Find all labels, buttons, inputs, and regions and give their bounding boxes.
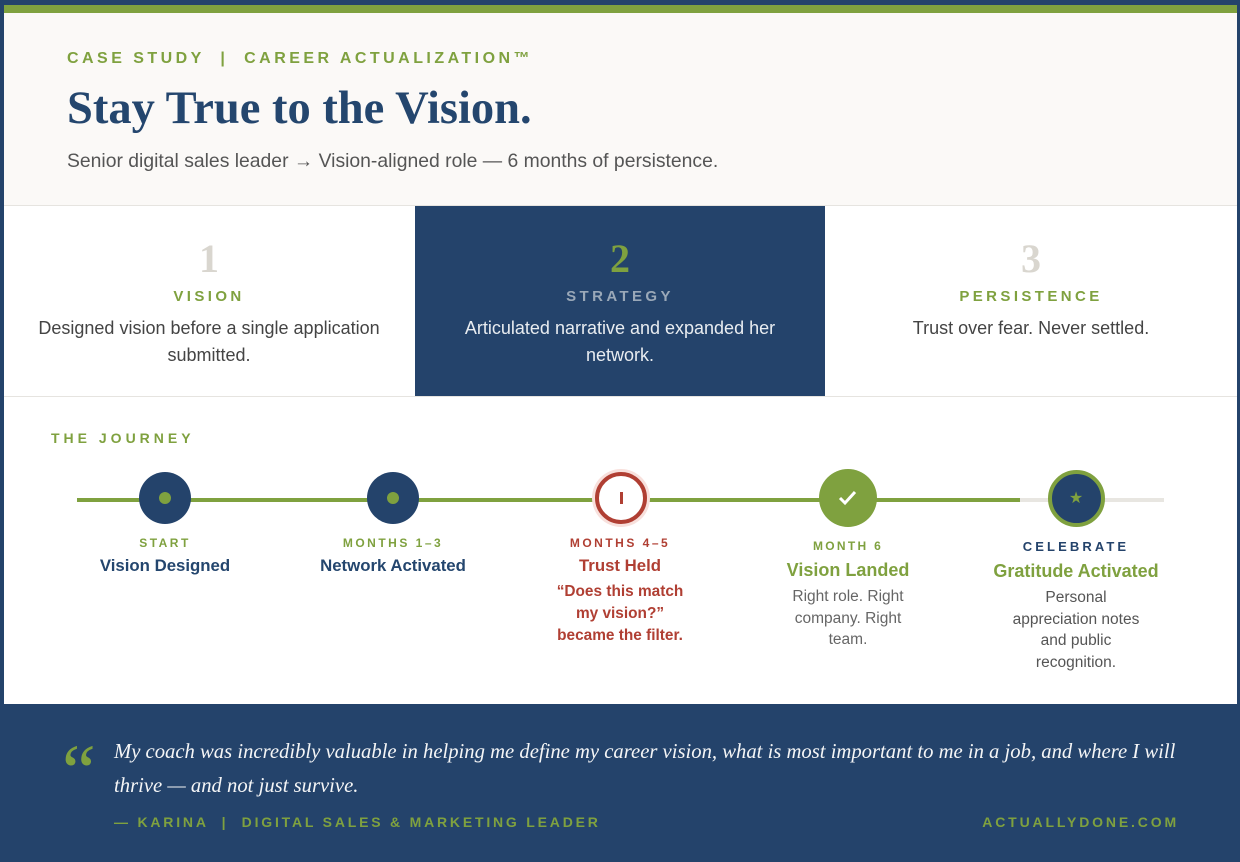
panel: journey — [4, 397, 1237, 704]
description: Designed vision before a single application — [38, 318, 380, 338]
step label: MONTHS 1–3 — [343, 536, 443, 550]
quote text — [114, 741, 1175, 797]
eyebrow: CASE STUDY | CAREER ACTUALIZATION™ — [67, 50, 533, 67]
icon: dot — [387, 492, 399, 504]
pillar 3: persistence — [913, 236, 1149, 338]
filter quote: became the filter. — [557, 627, 683, 644]
description — [38, 318, 380, 365]
step name: Trust Held — [579, 556, 661, 575]
attribution: — KARINA | DIGITAL SALES & MARKETING LEADER — [114, 814, 601, 830]
step label: MONTHS 4–5 — [570, 536, 670, 550]
pillar 1: vision — [38, 236, 380, 365]
icon: exclamation — [620, 492, 622, 504]
step note: Right role. Right — [792, 588, 904, 605]
title: Stay True to the Vision. — [67, 83, 532, 134]
number 3: 3 — [1021, 236, 1041, 281]
label strategy: STRATEGY — [566, 288, 674, 305]
step name: Vision Designed — [100, 556, 230, 575]
node: start — [139, 472, 191, 524]
step note: appreciation notes — [1013, 610, 1139, 628]
number 2: 2 — [610, 236, 630, 281]
step: celebrate — [993, 539, 1159, 670]
quote text: My coach was incredibly valuable in helping me define my career vision, what is most important to me in a job, and where I will — [114, 741, 1175, 763]
description: network. — [586, 345, 654, 365]
step note: recognition. — [1036, 654, 1116, 670]
number 1: 1 — [199, 236, 219, 281]
pillar 2: strategy — [415, 206, 825, 396]
filter quote: my vision?” — [576, 605, 664, 622]
step name: Gratitude Activated — [993, 561, 1159, 581]
description: submitted. — [167, 345, 251, 365]
journey heading: THE JOURNEY — [51, 430, 195, 446]
step label: MONTH 6 — [813, 539, 883, 553]
description: Trust over fear. Never settled. — [913, 318, 1149, 338]
label vision: VISION — [173, 288, 245, 305]
panel: pillars — [4, 205, 1237, 397]
step note: and public — [1041, 632, 1111, 649]
step: months 4-5 — [557, 536, 683, 644]
step note — [792, 588, 904, 648]
step name: Network Activated — [320, 556, 466, 575]
step label: CELEBRATE — [1023, 539, 1129, 554]
step note — [1013, 589, 1139, 670]
node: months 1-3 — [367, 472, 419, 524]
filter quote — [557, 583, 683, 644]
panel: header — [4, 13, 1237, 205]
node: celebrate — [1048, 470, 1105, 527]
website: ACTUALLYDONE.COM — [982, 814, 1179, 830]
description — [464, 318, 775, 365]
timeline track — [77, 498, 1164, 502]
step note: company. Right — [795, 610, 901, 626]
description: Articulated narrative and expanded her — [465, 318, 775, 338]
quote text: thrive — and not just survive. — [114, 775, 358, 797]
label persistence: PERSISTENCE — [959, 288, 1103, 305]
step label: START — [139, 536, 191, 550]
node: months 4-5 warning — [595, 472, 647, 524]
step: month 6 — [786, 539, 909, 648]
node: month 6 — [819, 469, 877, 527]
step note: team. — [829, 631, 867, 648]
step name: Vision Landed — [787, 560, 909, 580]
icon: star: ★ — [1069, 488, 1083, 507]
panel: testimonial — [0, 704, 1240, 860]
filter quote: “Does this match — [557, 583, 683, 600]
icon: quote mark: “ — [62, 730, 96, 814]
step note: Personal — [1045, 589, 1107, 606]
timeline progress — [77, 498, 1020, 502]
subtitle: Senior digital sales leader → Vision-aligned role — 6 months of persistence. — [67, 150, 718, 172]
step: start — [100, 536, 230, 575]
step: months 1-3 — [320, 536, 466, 575]
icon: check — [839, 491, 856, 506]
accent bar — [4, 5, 1237, 13]
icon: dot — [159, 492, 171, 504]
